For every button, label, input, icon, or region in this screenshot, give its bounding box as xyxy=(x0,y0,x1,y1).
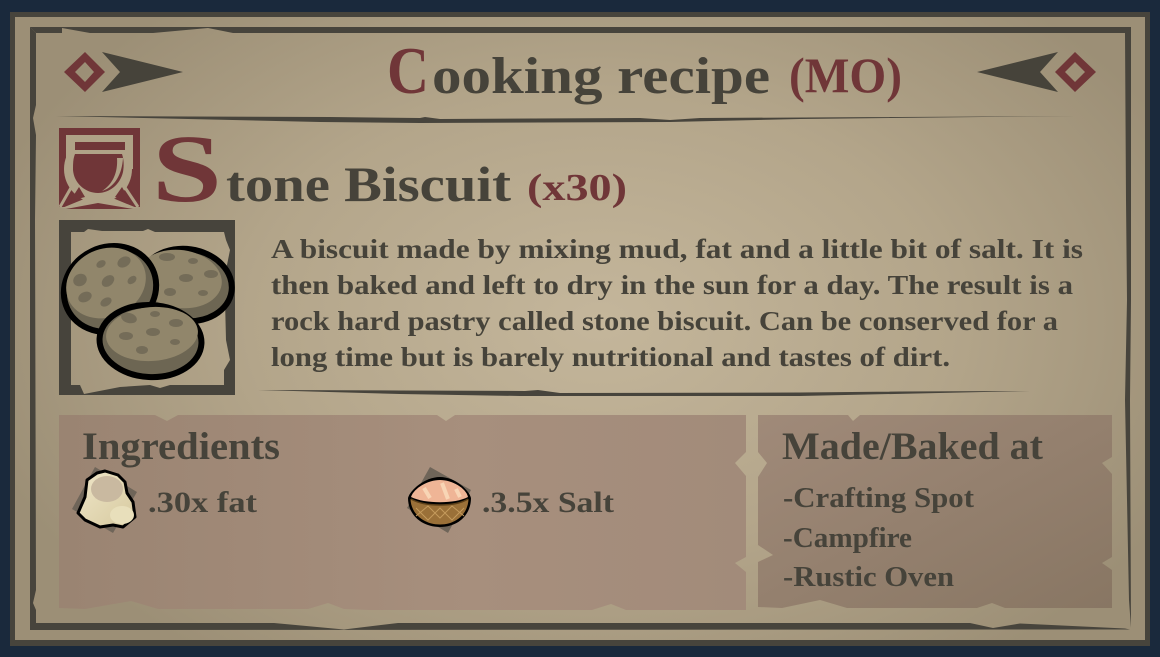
list: crafting stations xyxy=(783,482,974,593)
description text: A biscuit made by mixing mud, fat and a little bit of salt. It is xyxy=(271,234,1083,264)
front biscuit xyxy=(98,302,203,380)
label: salt: .3.5x Salt xyxy=(482,486,614,519)
left biscuit xyxy=(50,231,170,347)
description text xyxy=(271,234,1083,372)
divider: title rule xyxy=(56,116,1076,123)
back biscuit xyxy=(134,243,237,327)
icon: stone biscuit picture frame xyxy=(50,220,237,395)
subtitle initial: S xyxy=(152,115,222,222)
icon: fat xyxy=(72,467,137,533)
title suffix: (MO) xyxy=(789,47,902,103)
panel: ingredients xyxy=(59,415,746,610)
label: fat: .30x fat xyxy=(148,486,257,519)
list: crafting stations: -Campfire xyxy=(783,522,912,554)
subtitle: Stone Biscuit x30 xyxy=(152,115,627,222)
divider: description rule xyxy=(258,390,1030,396)
ornament: left diamond and arrow xyxy=(64,52,183,92)
heading: ingredients: Ingredients xyxy=(82,425,280,468)
description text: then baked and left to dry in the sun for a day. The result is a xyxy=(271,270,1074,300)
heading: made or baked at: Made/Baked at xyxy=(782,425,1043,468)
icon: cauldron emblem xyxy=(59,128,140,209)
subtitle body: tone Biscuit xyxy=(226,156,511,212)
description text: long time but is barely nutritional and tastes of dirt. xyxy=(271,342,950,372)
title xyxy=(387,34,902,108)
ornament: right diamond and arrow xyxy=(977,52,1096,92)
title body text: ooking recipe xyxy=(432,48,770,105)
icon: salt bowl xyxy=(407,467,471,533)
list: crafting stations: -Rustic Oven xyxy=(783,561,954,593)
description text: rock hard pastry called stone biscuit. Can be conserved for a xyxy=(271,306,1059,336)
list: crafting stations: -Crafting Spot xyxy=(783,482,974,514)
panel: made or baked at xyxy=(758,415,1112,608)
subtitle quantity: (x30) xyxy=(527,167,627,209)
title initial: C xyxy=(387,34,429,108)
